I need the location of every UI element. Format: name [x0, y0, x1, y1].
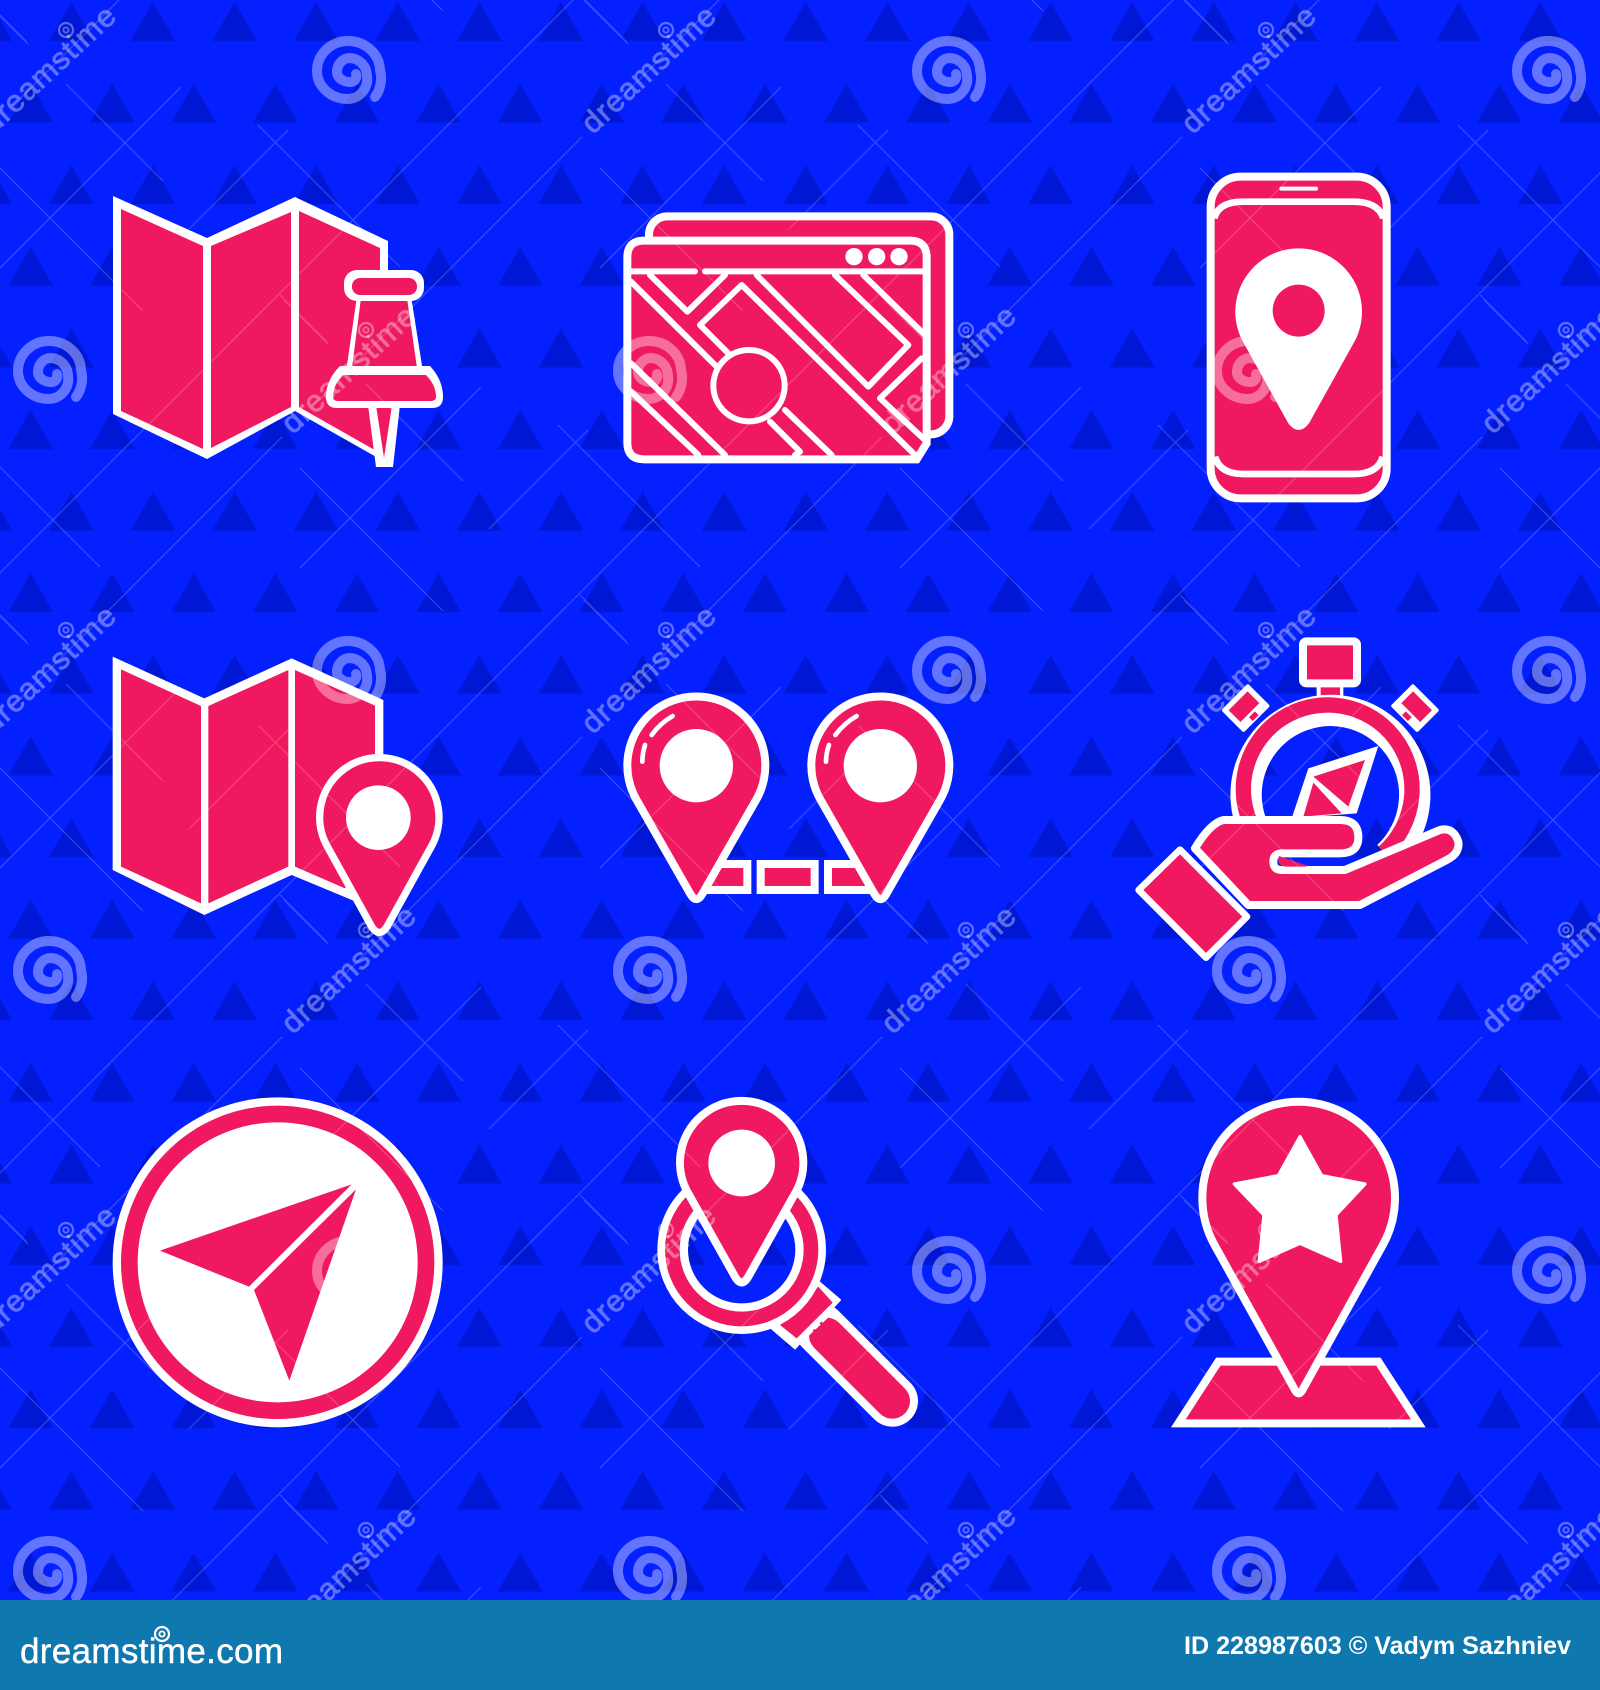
icon: browser windows with street map: [627, 216, 949, 459]
watermark text: dreamstime: [874, 298, 1023, 440]
watermark text: dreamstime: [1174, 1198, 1323, 1340]
watermark text: dreamstime: [874, 1498, 1023, 1640]
image id and credit: ID 228987603 © Vadym Sazhniev: [1184, 1632, 1571, 1660]
watermark text: dreamstime: [1174, 598, 1323, 740]
watermark text: dreamstime: [1174, 0, 1323, 140]
watermark text: dreamstime: [274, 1498, 423, 1640]
icon: folded map with push pin: [113, 196, 443, 467]
icon: hand holding stopwatch compass: [1139, 641, 1459, 958]
icon: location pin with star on map: [1178, 1102, 1418, 1423]
footer logo: dreamstime.com: [20, 1632, 283, 1671]
watermark text: dreamstime: [574, 0, 723, 140]
icon: smartphone with location pin: [1211, 177, 1387, 498]
icon: magnifying glass with location pin: [672, 1101, 892, 1401]
watermark text: dreamstime: [274, 898, 423, 1040]
watermark text: dreamstime: [274, 298, 423, 440]
watermark text: dreamstime: [574, 598, 723, 740]
watermark text: dreamstime: [874, 898, 1023, 1040]
watermark text: dreamstime: [574, 1198, 723, 1340]
icon: folded map with location pin: [113, 657, 439, 932]
icon: navigation arrow in circle: [113, 1097, 443, 1427]
footer bar: [0, 1600, 1600, 1690]
icon: two location pins with dashed route: [627, 696, 949, 899]
